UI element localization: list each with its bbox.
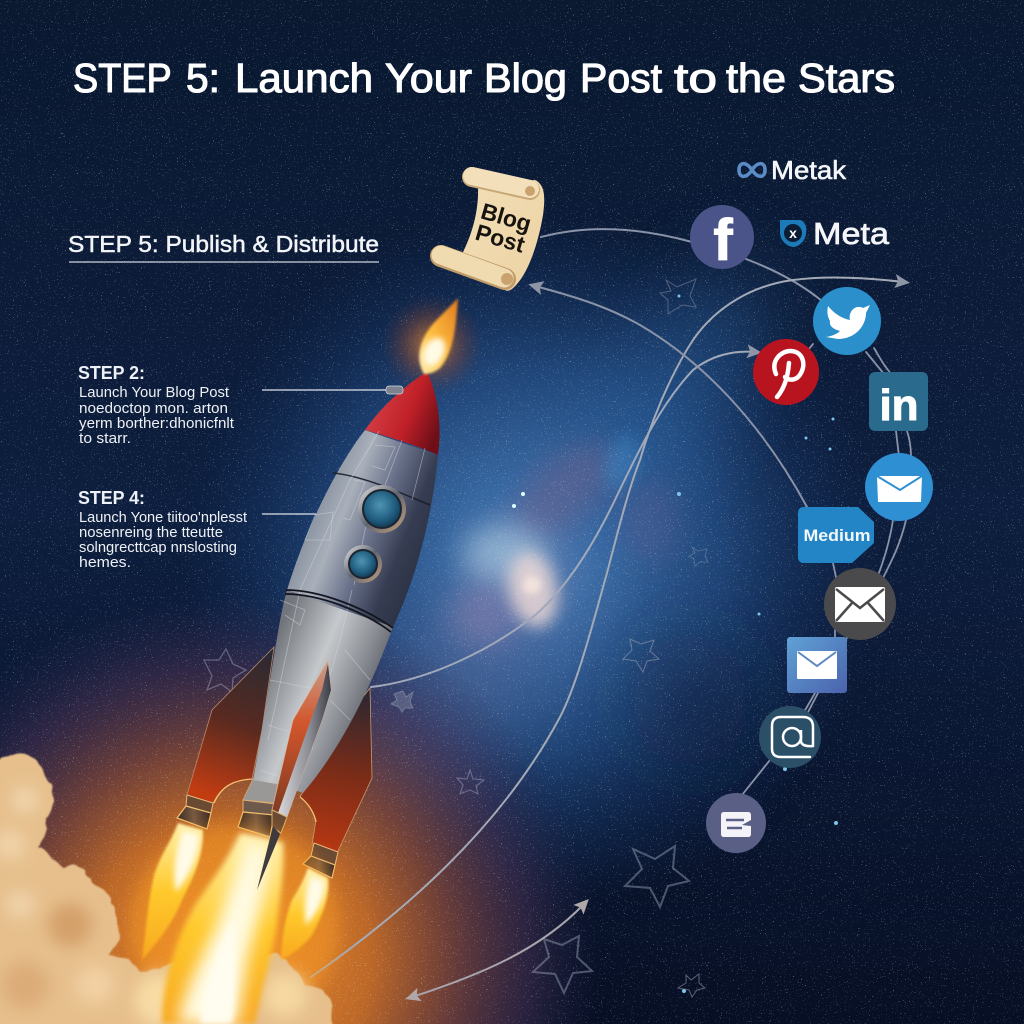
- center fin tail: [257, 826, 280, 890]
- text block: step 2: Launch Your Blog Post: [79, 384, 230, 401]
- large porthole: [358, 485, 406, 533]
- icon: twitter: [813, 287, 881, 355]
- title: Post: [580, 55, 663, 101]
- scroll page: [458, 180, 544, 291]
- icon: at sign: [759, 706, 821, 768]
- path: scroll to facebook: [541, 229, 692, 242]
- brand label: Metak: Metak: [771, 155, 847, 185]
- brand label: Meta: [780, 216, 890, 251]
- scroll top roll face: [472, 176, 530, 189]
- left fin: [187, 647, 274, 803]
- center engine flame: [162, 833, 283, 1024]
- distribution paths: [311, 229, 911, 997]
- text block: step 4: nosenreing the tteutte: [79, 524, 223, 541]
- path: icon chain: [742, 344, 911, 795]
- callout line: step 2: [262, 389, 392, 391]
- title: Your: [385, 55, 472, 101]
- text block: step 2: [78, 363, 235, 447]
- nose cone: [365, 372, 440, 455]
- scroll top roll: [472, 177, 530, 190]
- exhaust glow: [130, 825, 340, 1024]
- title: Stars: [798, 55, 895, 101]
- left engine flame: [142, 823, 203, 960]
- title: the: [726, 55, 786, 101]
- icon: facebook: [690, 205, 754, 273]
- hull seams: [260, 431, 430, 780]
- icon: pinterest: [753, 339, 819, 405]
- outline stars: [204, 279, 708, 997]
- center fin: [272, 660, 331, 833]
- smoke cloud: [0, 754, 335, 1024]
- text block: step 2: yerm borther:dhonicfnlt: [79, 415, 235, 432]
- scroll bottom roll face: [441, 255, 504, 278]
- icon: linkedin: in: [879, 381, 919, 430]
- icon: facebook: f: [713, 208, 733, 273]
- path: icons back to scroll: [535, 286, 807, 507]
- rocket: [177, 372, 440, 878]
- path: rocket to pinterest: [371, 352, 755, 687]
- hull upper: [287, 430, 438, 627]
- brand label: Meta: Meta: [813, 216, 890, 251]
- icon: medium: Medium: [804, 526, 870, 545]
- scroll bottom roll: [441, 256, 505, 279]
- hull band: [285, 590, 393, 632]
- right engine flame: [281, 868, 328, 960]
- roll ends: [501, 186, 535, 285]
- blog post scroll: [441, 176, 544, 291]
- title: Blog: [484, 55, 567, 101]
- text block: step 2: STEP 2:: [78, 363, 145, 383]
- brand label: Meta: x: [789, 225, 797, 241]
- left nozzle: [177, 795, 213, 829]
- hull lower: [253, 590, 393, 793]
- center nozzle: [238, 779, 277, 837]
- scroll label: Post: [473, 219, 528, 258]
- icon: blue envelope: [787, 637, 847, 693]
- title: 5:: [186, 55, 220, 101]
- text block: step 2: noedoctop mon. arton: [79, 400, 228, 417]
- scroll label: [473, 198, 534, 258]
- antenna: [386, 386, 403, 394]
- right fin: [300, 688, 372, 853]
- scroll label: Blog: [478, 198, 534, 237]
- text block: step 4: [78, 488, 248, 571]
- icon: linkedin: [869, 372, 928, 431]
- cloud shading: [0, 786, 307, 1024]
- text block: step 2: to starr.: [79, 430, 131, 447]
- path: launch pad to upper right: [311, 277, 903, 977]
- path: facebook to twitter: [746, 259, 822, 301]
- glow around nose flame: [380, 293, 484, 397]
- title: STEP: [73, 55, 171, 101]
- icon: inbox: [706, 793, 766, 853]
- title: to: [674, 55, 717, 101]
- text block: step 4: STEP 4:: [78, 488, 145, 508]
- icon: medium: [798, 507, 874, 563]
- brand label: Metak: [739, 155, 847, 185]
- text block: step 4: Launch Yone tiitoo'nplesst: [79, 509, 248, 526]
- callout line: step 4: [262, 513, 316, 515]
- text block: step 4: solngrecttcap nnslosting: [79, 539, 237, 556]
- path: bottom double arrow: [412, 904, 584, 997]
- title: Launch: [235, 55, 373, 101]
- small porthole: [344, 545, 382, 583]
- text block: step 4: hemes.: [79, 554, 131, 571]
- icon: mail circle: [865, 453, 933, 521]
- fin trim: [214, 779, 316, 822]
- heading: publish and distribute: STEP 5: Publish & Distribute: [68, 231, 379, 257]
- icon: dark envelope: [824, 568, 896, 640]
- nose flame: [419, 298, 458, 374]
- right nozzle: [303, 843, 338, 878]
